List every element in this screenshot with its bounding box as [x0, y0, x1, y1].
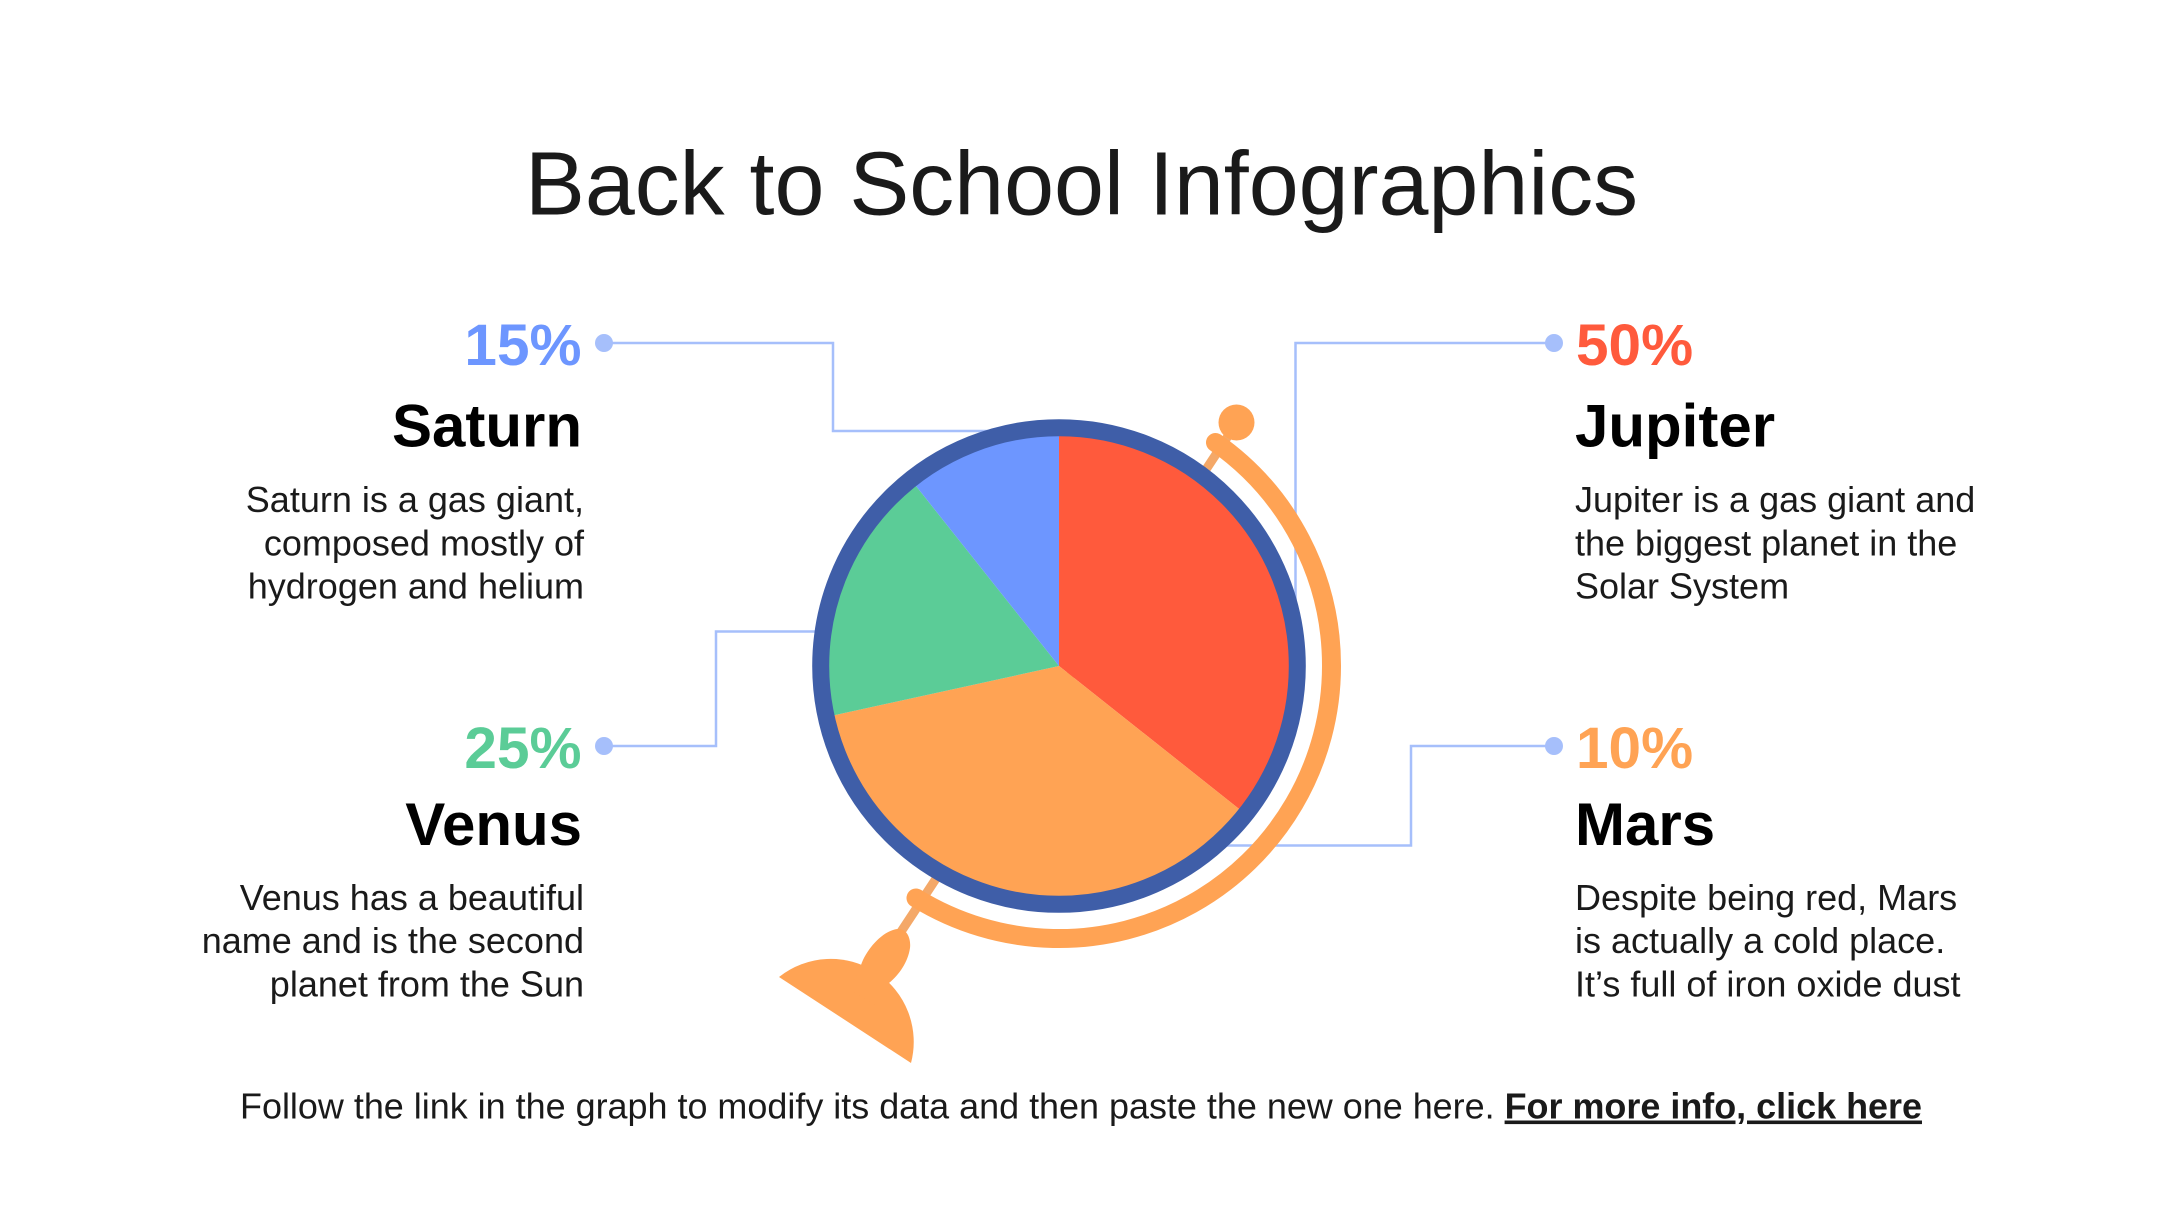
description: planet from the Sun	[270, 964, 584, 1004]
pie slice: Saturn blue	[915, 434, 1059, 666]
name: Jupiter	[1575, 392, 1775, 460]
description: It’s full of iron oxide dust	[1575, 964, 1961, 1004]
icon: globe stand	[779, 929, 914, 1063]
name: Saturn	[392, 392, 582, 460]
description: name and is the second	[202, 920, 584, 961]
percent: 15%	[464, 313, 582, 378]
panel: Mars	[1575, 716, 1961, 1004]
description: the biggest planet in the	[1575, 522, 1957, 564]
pie slice: Venus green	[827, 484, 1059, 716]
description: Solar System	[1575, 566, 1789, 606]
connector: Mars	[1225, 737, 1563, 846]
icon: globe axis	[885, 424, 1236, 956]
percent: 25%	[464, 716, 582, 781]
description: Saturn is a gas giant,	[246, 479, 584, 520]
panel: Saturn	[246, 313, 585, 606]
percent: 10%	[1576, 716, 1693, 781]
pie slice: Jupiter red	[1059, 434, 1291, 810]
description: composed mostly of	[264, 522, 585, 564]
name: Mars	[1575, 791, 1715, 858]
globe ring	[821, 428, 1297, 904]
connector: Saturn	[595, 334, 1000, 431]
pie slice: Mars orange	[832, 666, 1241, 898]
connector: Venus	[595, 632, 830, 755]
panel: Jupiter	[1575, 313, 1975, 606]
panel: Venus	[202, 716, 584, 1004]
title: Back to School Infographics	[525, 134, 1638, 234]
connector: Jupiter	[1296, 334, 1563, 600]
icon: globe meridian arc	[916, 442, 1332, 939]
globe pie chart	[779, 404, 1332, 1063]
percent: 50%	[1576, 313, 1693, 378]
name: Venus	[405, 791, 582, 858]
description: hydrogen and helium	[248, 566, 584, 606]
description: Despite being red, Mars	[1575, 877, 1957, 918]
description: Venus has a beautiful	[240, 877, 584, 918]
icon: globe top knob	[1218, 404, 1254, 440]
footer note: Follow the link in the graph to modify its data and then paste the new one here. For more info, click here	[240, 1086, 1922, 1126]
description: Jupiter is a gas giant and	[1575, 479, 1975, 520]
description: is actually a cold place.	[1575, 920, 1945, 961]
